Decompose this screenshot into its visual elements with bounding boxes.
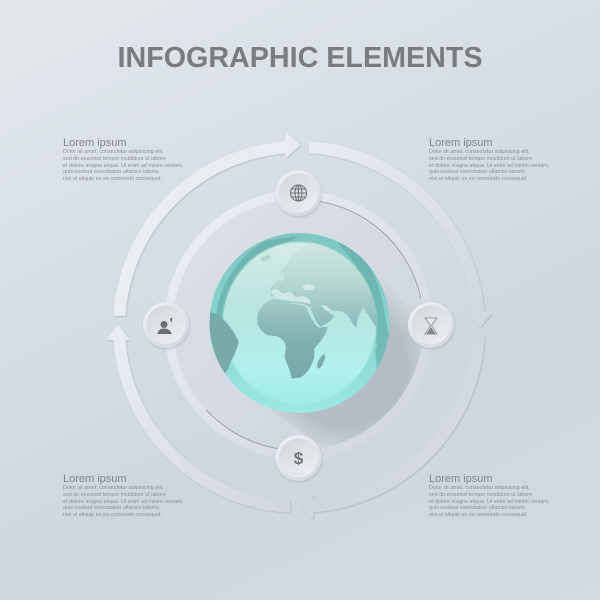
icon: dollar: $ xyxy=(294,449,304,468)
text block: top right: Dolor sit amet, consectetur adipisicing elit, xyxy=(429,149,530,155)
node: person icon xyxy=(143,302,189,348)
text block: bottom right: Dolor sit amet, consectetur adipisicing elit, xyxy=(429,485,530,491)
text block: bottom left: et dolore magna aliqua. Ut enim ad minim veniam, xyxy=(63,499,183,505)
text block: bottom right: nisi ut aliquip ex ea commodo consequat. xyxy=(429,512,528,518)
text block: top right: Lorem ipsum xyxy=(429,137,493,149)
icon: person xyxy=(158,318,172,334)
text block: bottom right: Lorem ipsum xyxy=(429,473,493,485)
text block: top left xyxy=(63,137,183,182)
text block: bottom left: Dolor sit amet, consectetur adipisicing elit, xyxy=(63,485,164,491)
text block: bottom right: sed do eiusmod tempor incididunt ut labore xyxy=(429,492,532,498)
text block: bottom right xyxy=(429,473,549,518)
outer arrow: top left xyxy=(113,132,300,316)
outer arrow: bottom left xyxy=(106,325,290,513)
text block: top right: quis nostrud exercitation ullamco laboris xyxy=(429,169,525,175)
title: INFOGRAPHIC ELEMENTS xyxy=(118,42,482,74)
Arabia xyxy=(311,306,334,326)
Eurasia xyxy=(270,243,376,328)
text block: bottom left: quis nostrud exercitation ullamco laboris xyxy=(63,505,159,511)
rim land shapes xyxy=(216,236,389,368)
text block: top left: quis nostrud exercitation ullamco laboris xyxy=(63,169,159,175)
Mediterranean and inland seas xyxy=(270,272,331,311)
diagram xyxy=(106,132,492,520)
text block: top left: sed do eiusmod tempor incididunt ut labore xyxy=(63,156,166,162)
text block: bottom left: sed do eiusmod tempor incididunt ut labore xyxy=(63,492,166,498)
Madagascar xyxy=(317,354,325,369)
text block: bottom left: nisi ut aliquip ex ea commodo consequat. xyxy=(63,512,162,518)
text block: bottom left: Lorem ipsum xyxy=(63,473,127,485)
text block: top left: nisi ut aliquip ex ea commodo consequat. xyxy=(63,176,162,182)
Africa xyxy=(257,299,328,379)
text block: bottom right: quis nostrud exercitation ullamco laboris xyxy=(429,505,525,511)
globe xyxy=(207,233,392,413)
icon: hourglass xyxy=(425,318,437,334)
outer arrow: bottom right xyxy=(300,337,485,520)
globe shadow xyxy=(276,293,422,446)
text block: top right xyxy=(429,137,549,182)
inner ring xyxy=(168,195,428,455)
text block: top left: et dolore magna aliqua. Ut enim ad minim veniam, xyxy=(63,163,183,169)
rim islands xyxy=(260,254,272,262)
continents xyxy=(257,242,387,379)
outer arrow: top right xyxy=(309,141,492,328)
icon: globe xyxy=(290,185,306,201)
text block: top right: et dolore magna aliqua. Ut enim ad minim veniam, xyxy=(429,163,549,169)
globe interior xyxy=(222,242,376,404)
South America xyxy=(210,312,239,373)
text block: top right: nisi ut aliquip ex ea commodo consequat. xyxy=(429,176,528,182)
node: hourglass icon xyxy=(408,302,454,348)
text block: bottom left xyxy=(63,473,183,518)
node: dollar icon xyxy=(276,435,322,481)
text block: top left: Dolor sit amet, consectetur adipisicing elit, xyxy=(63,149,164,155)
text block: top right: sed do eiusmod tempor incididunt ut labore xyxy=(429,156,532,162)
text block: bottom right: et dolore magna aliqua. Ut enim ad minim veniam, xyxy=(429,499,549,505)
text block: top left: Lorem ipsum xyxy=(63,137,127,149)
node: globe icon xyxy=(276,170,322,216)
